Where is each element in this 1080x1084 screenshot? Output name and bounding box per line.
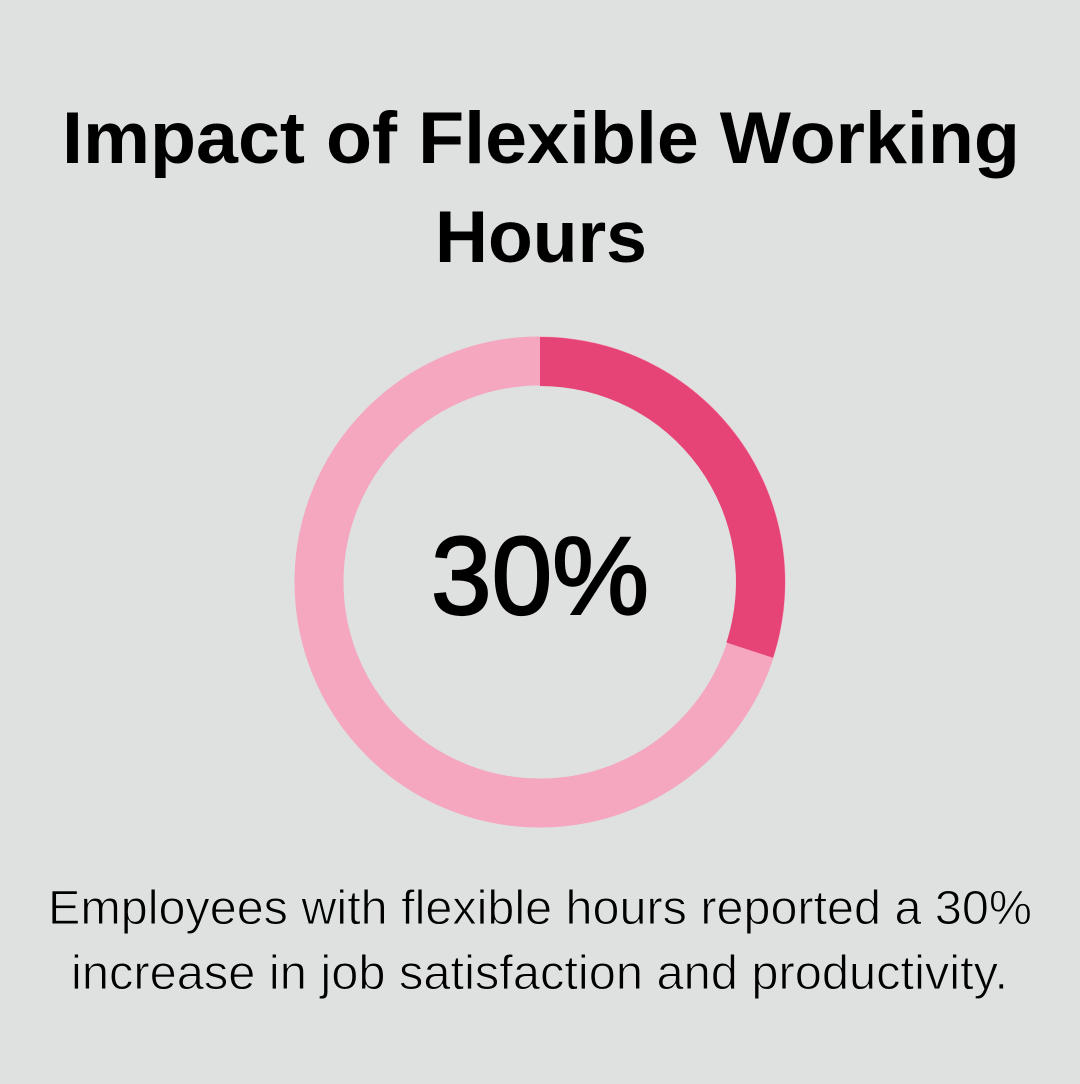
title: [62, 98, 1020, 278]
center value: 30%: [431, 515, 649, 638]
title: Impact of Flexible Working: [62, 98, 1020, 179]
description text: increase in job satisfaction and productivity.: [71, 947, 1008, 1000]
description text: Employees with flexible hours reported a 30%: [48, 882, 1032, 935]
title: Hours: [435, 197, 647, 278]
donut track: remaining 70%: [319, 361, 761, 803]
donut chart: 30%: [319, 337, 785, 803]
description text: [48, 882, 1032, 1000]
donut segment: 30%: [540, 337, 785, 658]
